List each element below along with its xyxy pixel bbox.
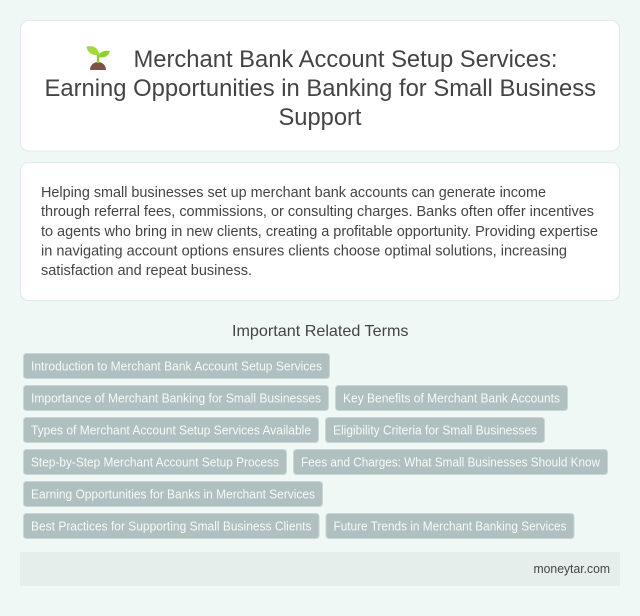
chip: earning opportunities	[24, 482, 322, 506]
chip: key benefits: Key Benefits of Merchant Bank Accounts	[343, 390, 560, 406]
chip: eligibility: Eligibility Criteria for Small Businesses	[333, 422, 537, 438]
icon: seedling	[86, 46, 110, 70]
chip: future trends	[326, 514, 574, 538]
chip: importance	[24, 386, 328, 410]
chip: introduction: Introduction to Merchant Bank Account Setup Services	[31, 358, 322, 374]
footer	[20, 552, 620, 586]
chip: eligibility	[326, 418, 544, 442]
text block: description: in navigating account options ensures clients choose optimal solutions, increasing	[41, 244, 567, 260]
text block: description: through referral fees, commissions, or consulting charges. Banks often offer incentives	[41, 204, 594, 220]
panel: description	[20, 162, 620, 300]
panel: term chips	[24, 354, 608, 538]
chip: earning opportunities: Earning Opportunities for Banks in Merchant Services	[31, 486, 315, 502]
chip: importance: Importance of Merchant Banking for Small Businesses	[31, 390, 321, 406]
chip: fees: Fees and Charges: What Small Businesses Should Know	[301, 454, 601, 470]
chip: key benefits	[336, 386, 568, 410]
chip: setup process: Step-by-Step Merchant Account Setup Process	[31, 454, 279, 470]
title: Merchant Bank Account Setup Services:	[134, 46, 558, 73]
title	[44, 46, 596, 131]
text block: description: Helping small businesses set up merchant bank accounts can generate income	[41, 185, 546, 201]
chip: fees	[294, 450, 608, 474]
panel: title card	[20, 20, 620, 151]
chip: types	[24, 418, 318, 442]
text block: description	[41, 185, 598, 279]
chip: types: Types of Merchant Account Setup Services Available	[31, 422, 311, 438]
chip: best practices	[24, 514, 319, 538]
chip: best practices: Best Practices for Supporting Small Business Clients	[31, 518, 312, 534]
footer: moneytar.com	[534, 562, 610, 576]
text block: description: satisfaction and repeat business.	[41, 263, 252, 279]
title: Support	[278, 104, 362, 131]
heading: related terms: Important Related Terms	[232, 323, 408, 340]
text block: description: to agents who bring in new clients, creating a profitable opportunity. Providing expertise	[41, 224, 598, 240]
chip: introduction	[24, 354, 330, 378]
title: Earning Opportunities in Banking for Small Business	[44, 75, 596, 102]
chip: setup process	[24, 450, 286, 474]
chip: future trends: Future Trends in Merchant Banking Services	[334, 518, 566, 534]
